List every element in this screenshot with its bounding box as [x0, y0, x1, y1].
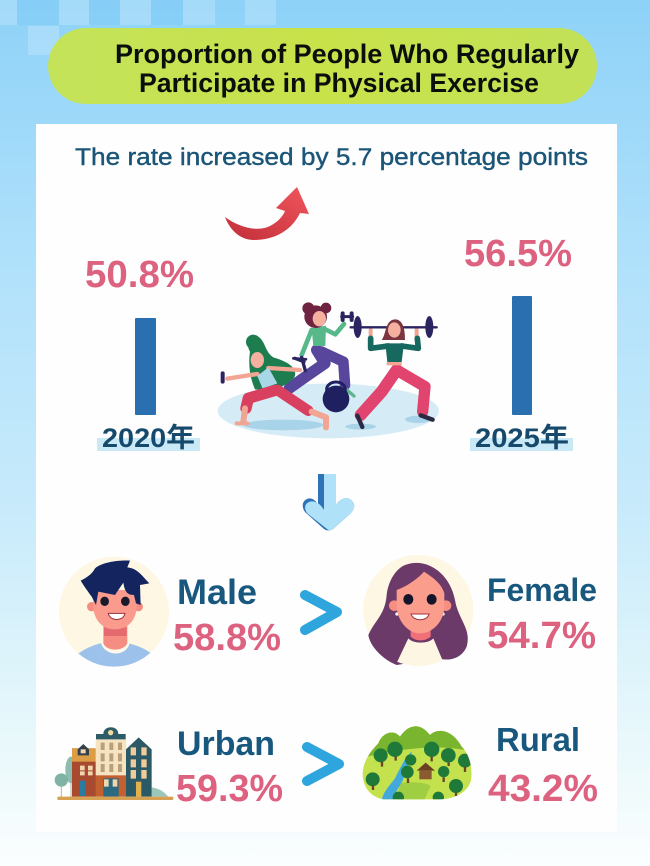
figure: green-haired woman [223, 335, 326, 427]
panel: main white card [36, 124, 617, 832]
title text: Proportion of People Who Regularly [115, 39, 579, 69]
panel: urban [55, 725, 283, 810]
bar 2025 [512, 296, 532, 415]
value: urban: 59.3% [176, 768, 283, 810]
value 2020: 50.8% [85, 254, 194, 296]
figure: purple-legged woman [289, 302, 354, 396]
illustration: three women exercising [218, 302, 439, 438]
icon: city buildings [55, 727, 173, 800]
label: male: Male [177, 573, 257, 612]
title text: Participate in Physical Exercise [139, 68, 539, 98]
icon: red upward arrow [225, 187, 309, 240]
icon: male avatar [59, 557, 169, 673]
icon: greater-than, gender [305, 595, 337, 630]
subtitle: rate increase: The rate increased by 5.7 percentage points [75, 144, 588, 171]
label 2020: 2020年 [102, 423, 195, 453]
icon: female avatar [363, 555, 473, 670]
chart: 2020 column [85, 254, 200, 453]
value: rural: 43.2% [488, 768, 598, 810]
title banner [48, 28, 597, 104]
value: male: 58.8% [173, 617, 281, 659]
icon: greater-than, residence [307, 747, 339, 781]
icon: rural landscape [362, 726, 472, 800]
icon: kettlebell [323, 382, 349, 412]
label 2025: 2025年 [475, 423, 569, 453]
panel: rural [362, 726, 597, 802]
figure: woman with barbell [351, 316, 437, 427]
value: female: 54.7% [487, 615, 596, 657]
panel: female [363, 555, 597, 670]
chart: 2025 column [464, 233, 573, 453]
bar 2020 [135, 318, 156, 415]
panel: male [59, 557, 281, 673]
title text [115, 39, 579, 98]
label: urban: Urban [177, 725, 275, 763]
value 2025: 56.5% [464, 233, 572, 275]
label: female: Female [487, 572, 597, 608]
icon: down arrow [303, 474, 354, 530]
label: rural: Rural [496, 721, 580, 758]
